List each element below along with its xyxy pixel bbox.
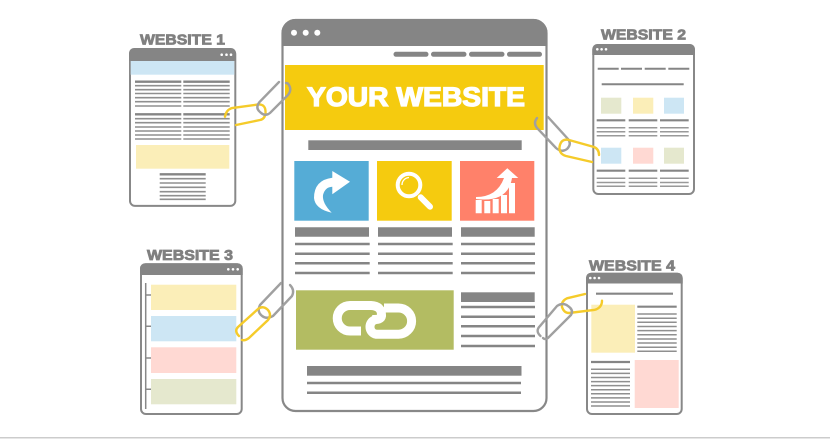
icon tile: share arrow — [294, 161, 369, 221]
website 4 label: WEBSITE 4 — [589, 258, 676, 275]
paperclip link: website 1 — [225, 82, 290, 125]
column text blocks — [295, 232, 535, 273]
nav pills — [396, 52, 540, 57]
text lines — [597, 120, 689, 186]
colour squares — [601, 98, 684, 164]
blue header — [131, 61, 234, 75]
icon tile: growth chart — [460, 161, 534, 221]
title bar — [140, 263, 243, 275]
nav and heading lines — [598, 69, 689, 84]
bottom text block — [307, 366, 522, 393]
right text block — [461, 292, 535, 346]
website 3 label: WEBSITE 3 — [147, 247, 233, 264]
icon tile: magnifier — [377, 161, 452, 221]
title bar — [592, 44, 695, 55]
text columns — [135, 82, 230, 199]
panel: website 4 — [586, 258, 683, 414]
yellow block — [136, 145, 229, 169]
title bar — [586, 273, 683, 284]
heading bar — [308, 140, 522, 150]
panel: website 1 — [129, 32, 236, 206]
panel: website 2 — [592, 26, 695, 194]
window dots — [291, 30, 320, 36]
panel: website 3 — [140, 247, 243, 414]
paperclip link: website 2 — [535, 117, 599, 162]
colour rows — [151, 285, 236, 404]
paperclip link: website 3 — [236, 283, 293, 340]
panel: main window — [282, 19, 548, 411]
main title bar — [282, 19, 548, 46]
paperclip link: website 4 — [538, 294, 602, 339]
yellow and pink blocks — [591, 305, 679, 408]
title bar — [129, 48, 236, 61]
website 2 label: WEBSITE 2 — [601, 26, 686, 44]
text lines — [591, 294, 677, 406]
timeline — [146, 283, 151, 409]
link tile — [296, 290, 454, 350]
yellow banner — [285, 65, 544, 130]
banner title: YOUR WEBSITE — [307, 82, 525, 112]
website 1 label: WEBSITE 1 — [140, 32, 225, 48]
icon: chain link — [337, 306, 412, 334]
